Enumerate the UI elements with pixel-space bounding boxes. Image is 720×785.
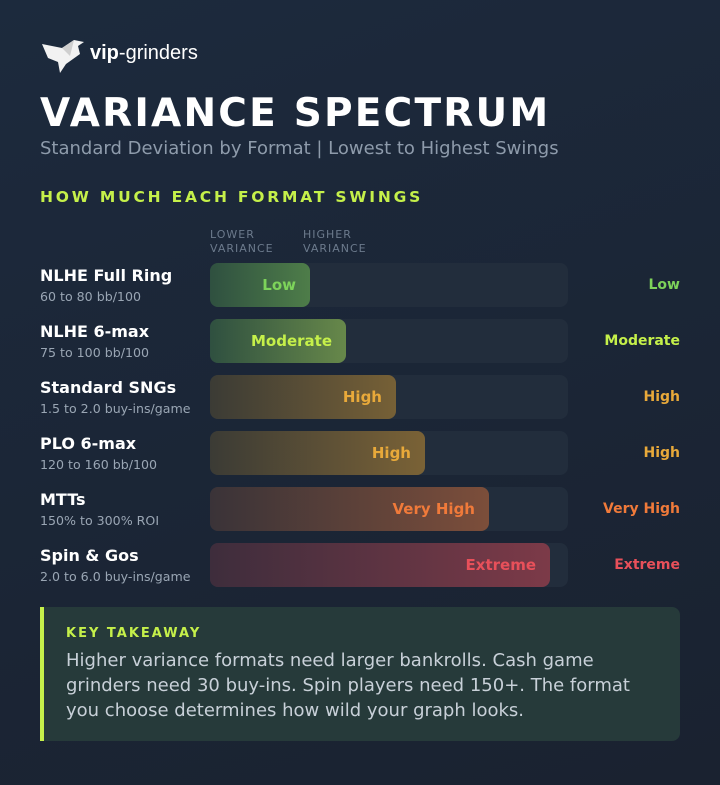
axis labels: VARIANCE: [210, 242, 274, 255]
row: NLHE 6-max: 75 to 100 bb/100: [40, 345, 149, 360]
row: MTTs: [40, 487, 680, 531]
row: MTTs: Very High: [393, 500, 475, 518]
axis labels: VARIANCE: [303, 242, 367, 255]
callout: key takeaway: Higher variance formats need larger bankrolls. Cash game grinders need 30 buy-ins. Spin players need 150+. The format you choose determines how wild your graph looks.: [66, 650, 630, 721]
row: NLHE 6-max: Moderate: [251, 332, 332, 350]
axis labels: HIGHER: [303, 228, 352, 241]
row: PLO 6-max: High: [372, 444, 411, 462]
row: MTTs: Very High: [603, 501, 680, 517]
row: Spin & Gos: Spin & Gos: [40, 546, 139, 565]
row: Standard SNGs: [40, 375, 680, 419]
row: PLO 6-max: 120 to 160 bb/100: [40, 457, 157, 472]
callout: key takeaway: KEY TAKEAWAY: [66, 626, 201, 641]
row: Spin & Gos: Extreme: [614, 557, 680, 573]
row: PLO 6-max: [40, 431, 680, 475]
row: PLO 6-max: PLO 6-max: [40, 434, 136, 453]
row: NLHE 6-max: Moderate: [604, 333, 680, 349]
row: Standard SNGs: 1.5 to 2.0 buy-ins/game: [40, 401, 190, 416]
row: NLHE Full Ring: 60 to 80 bb/100: [40, 289, 141, 304]
row: Standard SNGs: Standard SNGs: [40, 378, 176, 397]
row: NLHE Full Ring: Low: [262, 276, 296, 294]
row: PLO 6-max: High: [643, 445, 680, 461]
row: NLHE 6-max: NLHE 6-max: [40, 322, 149, 341]
row: Spin & Gos: [40, 543, 680, 587]
row: Standard SNGs: High: [343, 388, 382, 406]
axis labels: LOWER: [210, 228, 255, 241]
axis labels: [210, 228, 367, 255]
row: Spin & Gos: Extreme: [466, 556, 536, 574]
title: VARIANCE SPECTRUM: [40, 91, 550, 136]
row: MTTs: MTTs: [40, 490, 86, 509]
row: Standard SNGs: High: [643, 389, 680, 405]
row: NLHE 6-max: [40, 319, 680, 363]
section heading: HOW MUCH EACH FORMAT SWINGS: [40, 188, 423, 206]
row: NLHE Full Ring: [40, 263, 680, 307]
row: MTTs: 150% to 300% ROI: [40, 513, 159, 528]
callout: key takeaway: [40, 607, 680, 741]
logo: vip-grinders: [90, 42, 198, 64]
subtitle: Standard Deviation by Format | Lowest to Highest Swings: [40, 138, 559, 159]
row: Spin & Gos: 2.0 to 6.0 buy-ins/game: [40, 569, 190, 584]
row: NLHE Full Ring: Low: [649, 277, 680, 293]
logo: [42, 40, 198, 73]
row: NLHE Full Ring: NLHE Full Ring: [40, 266, 172, 285]
